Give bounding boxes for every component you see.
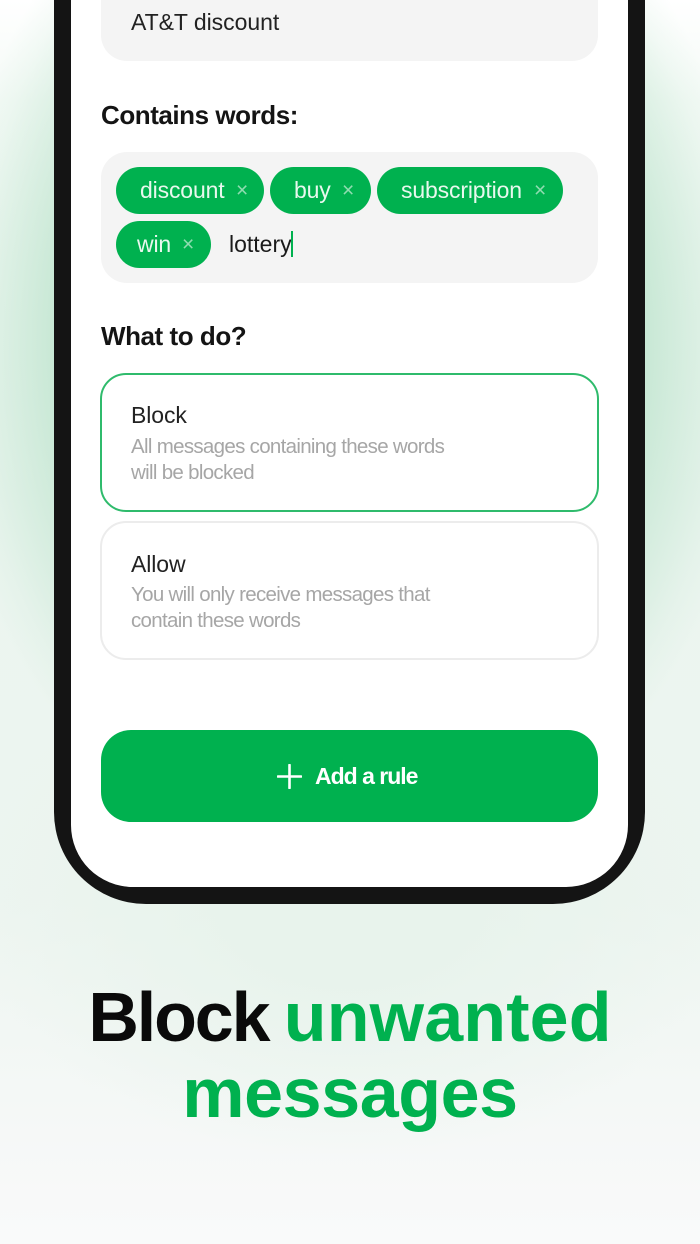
- option description: All messages containing these words: [131, 435, 444, 458]
- button label: Add a rule: [315, 763, 417, 789]
- headline: messages: [182, 1054, 518, 1132]
- option title: Allow: [131, 551, 185, 577]
- input value: AT&T discount: [131, 9, 279, 35]
- text cursor: [291, 231, 293, 257]
- chip: discount: discount: [140, 177, 224, 203]
- chip: subscription: subscription: [401, 177, 522, 203]
- chip: win: [116, 221, 211, 268]
- phone mockup: [54, 0, 645, 904]
- chip: discount: ×: [236, 179, 248, 202]
- chip: win: win: [137, 231, 171, 257]
- option description: You will only receive messages that: [131, 583, 430, 606]
- option description: [131, 583, 430, 632]
- heading: contains words: Contains words:: [101, 100, 298, 130]
- option: allow: [100, 521, 599, 660]
- chip: win: ×: [182, 233, 194, 256]
- headline: [88, 978, 612, 1132]
- option title: Block: [131, 402, 187, 428]
- headline: Block unwanted: [88, 978, 612, 1056]
- chip: subscription: ×: [534, 179, 546, 202]
- typed word: lottery: [229, 231, 292, 257]
- chip: subscription: [377, 167, 563, 214]
- chip: discount: [116, 167, 264, 214]
- heading: what to do: What to do?: [101, 321, 246, 351]
- chip: buy: [270, 167, 371, 214]
- name input field: [101, 0, 598, 61]
- option: block: [100, 373, 599, 512]
- chip: buy: ×: [342, 179, 354, 202]
- phone screen: [71, 0, 628, 887]
- option description: will be blocked: [131, 460, 254, 484]
- icon: plus: [277, 764, 302, 789]
- add rule button: [101, 730, 598, 822]
- option description: [131, 435, 444, 484]
- words panel: [101, 152, 598, 283]
- chip: buy: buy: [294, 177, 331, 203]
- option description: contain these words: [131, 608, 300, 632]
